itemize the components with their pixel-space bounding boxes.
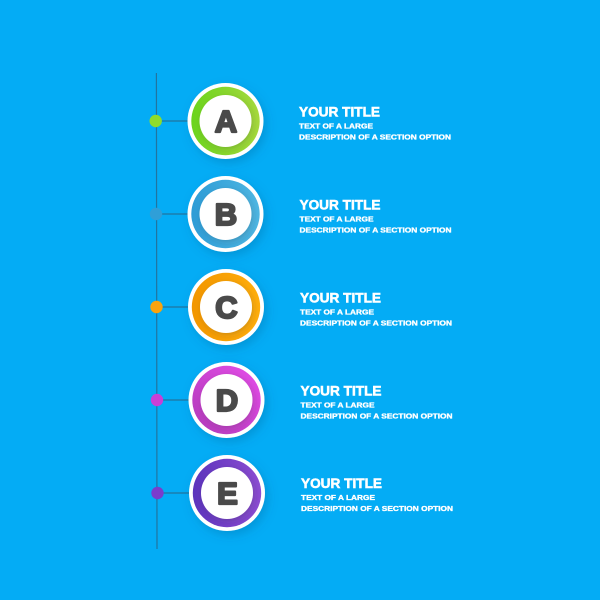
badge D xyxy=(188,362,264,438)
connector and dot C xyxy=(150,301,190,313)
timeline vertical line xyxy=(155,73,158,549)
text A xyxy=(299,104,451,142)
badge C: C xyxy=(215,290,238,325)
text C: TEXT OF A LARGE xyxy=(300,308,374,316)
step B xyxy=(150,176,452,252)
text E: YOUR TITLE xyxy=(301,476,382,491)
text D: DESCRIPTION OF A SECTION OPTION xyxy=(300,412,452,420)
text D: YOUR TITLE xyxy=(300,384,382,398)
badge B xyxy=(188,176,264,252)
badge A xyxy=(188,83,264,159)
connector and dot A xyxy=(150,115,190,127)
badge A: A xyxy=(215,104,237,139)
text E: DESCRIPTION OF A SECTION OPTION xyxy=(301,504,453,513)
connector and dot D xyxy=(151,394,191,406)
text A: DESCRIPTION OF A SECTION OPTION xyxy=(299,132,451,142)
text A: YOUR TITLE xyxy=(299,104,380,120)
text B: TEXT OF A LARGE xyxy=(300,214,374,224)
step C xyxy=(150,269,452,345)
badge B: B xyxy=(215,197,237,232)
text E: TEXT OF A LARGE xyxy=(301,493,375,502)
connector and dot E xyxy=(151,487,192,499)
badge E: E xyxy=(217,476,238,511)
step E xyxy=(151,455,453,531)
text B xyxy=(300,198,452,234)
text A: TEXT OF A LARGE xyxy=(299,122,373,130)
text D: TEXT OF A LARGE xyxy=(300,400,374,410)
text C: DESCRIPTION OF A SECTION OPTION xyxy=(300,318,452,328)
badge E xyxy=(189,455,265,531)
text E xyxy=(301,476,453,513)
step A xyxy=(150,83,451,159)
text B: DESCRIPTION OF A SECTION OPTION xyxy=(300,226,452,234)
text C: YOUR TITLE xyxy=(300,290,381,306)
text D xyxy=(300,384,452,420)
connector and dot B xyxy=(150,208,190,220)
text B: YOUR TITLE xyxy=(300,198,380,212)
badge C xyxy=(188,269,264,345)
text C xyxy=(300,290,452,328)
step D xyxy=(151,362,453,438)
badge D: D xyxy=(216,383,238,418)
